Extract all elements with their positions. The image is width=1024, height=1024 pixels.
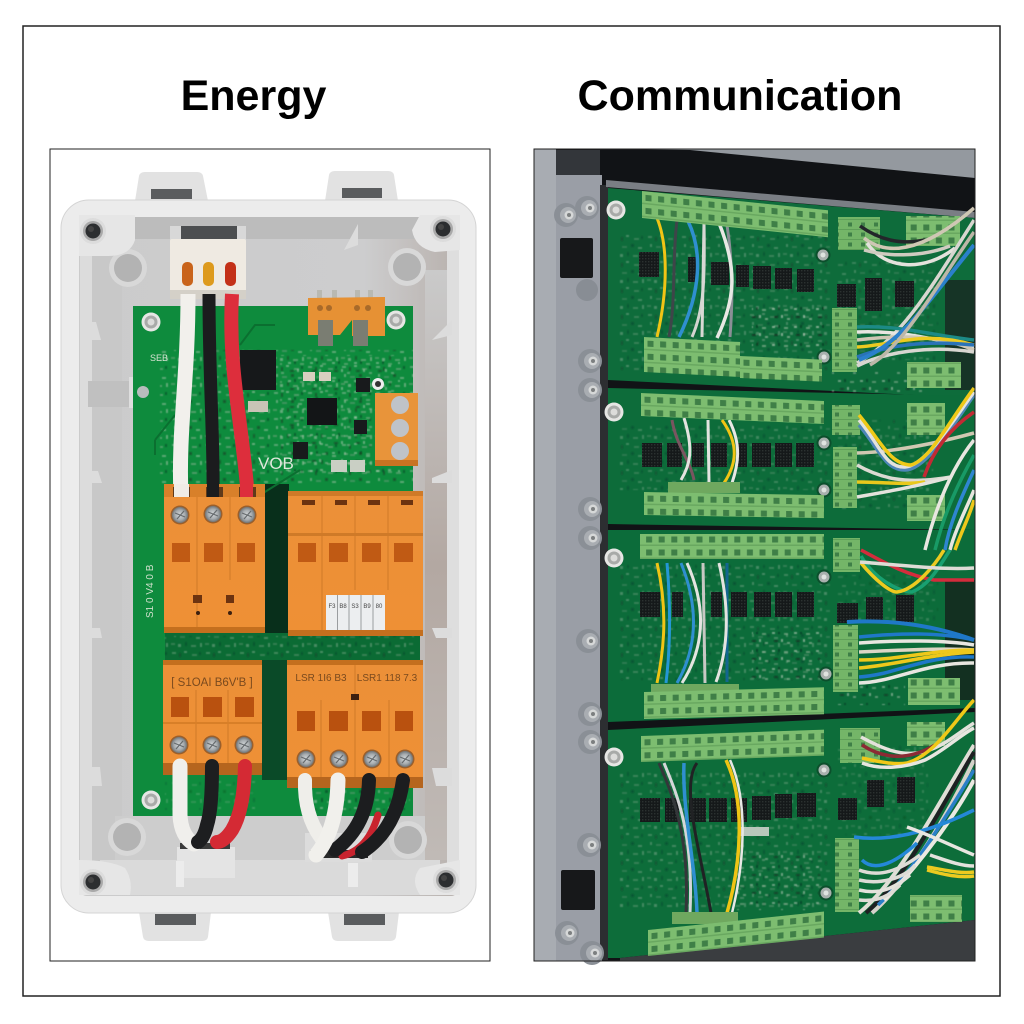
three-way screw terminal <box>375 393 418 466</box>
enclosure mounting tabs <box>135 171 399 941</box>
white label strip: S3 <box>351 604 359 610</box>
terminal label right: LSR1 118 7.3 <box>357 673 418 684</box>
panel: communication rack photo <box>534 149 975 965</box>
terminal strips board 2 <box>641 393 945 521</box>
bottom chassis rail <box>620 920 975 961</box>
circuit board <box>133 306 420 816</box>
left wires board 3 <box>657 563 727 683</box>
white label strip <box>326 595 385 630</box>
rack background <box>534 149 975 961</box>
right wires board 2 <box>857 388 974 550</box>
terminal strips board 1 <box>642 191 961 388</box>
board marking rotated: S1 0 V4 0 B <box>145 564 156 618</box>
left wires board 4 <box>659 760 743 913</box>
small board label <box>740 827 769 836</box>
enclosure rim <box>61 200 476 913</box>
terminal strips board 3 <box>640 534 960 719</box>
white label strip: 80 <box>376 604 383 610</box>
terminal block: bottom right <box>287 660 423 788</box>
panel frame <box>534 149 975 961</box>
right wires board 3 <box>847 550 974 683</box>
terminal block: bottom left <box>163 660 262 775</box>
left wires board 2 <box>672 418 738 483</box>
left wires board 1 <box>657 218 732 338</box>
white label strip: F3 <box>328 604 336 610</box>
power wires top <box>180 294 248 498</box>
title: Communication: Communication <box>578 72 902 120</box>
enclosure floor <box>79 217 459 896</box>
right wires board 1 <box>857 208 974 366</box>
small orange connector <box>308 290 385 346</box>
board 4 <box>604 712 975 958</box>
white label strip: B9 <box>363 604 371 610</box>
rail bolts <box>554 196 604 965</box>
white wire connector <box>170 226 246 299</box>
rack rail <box>534 149 608 961</box>
top cover <box>600 149 975 178</box>
terminal block: top right <box>288 491 423 636</box>
terminal label left: LSR 1I6 B3 <box>295 673 347 684</box>
terminal block: top left <box>164 484 265 633</box>
board top rail <box>606 180 975 218</box>
right wires board 4 <box>854 700 974 913</box>
mounting arm <box>88 377 161 408</box>
board marking VOB: VOB <box>258 454 294 473</box>
board marking left: SEB <box>150 353 168 363</box>
board 2 <box>604 388 975 530</box>
title: Energy: Energy <box>181 72 326 120</box>
white label strip: B8 <box>339 604 347 610</box>
panel: energy enclosure photo <box>50 149 490 961</box>
board screws <box>137 310 406 810</box>
board 3 <box>604 530 975 722</box>
wire relief blocks <box>176 833 372 887</box>
power wires bottom right <box>305 780 403 856</box>
board 1 <box>606 188 975 398</box>
terminal label: [ S1OAI B6V'B ] <box>171 677 253 689</box>
terminal strips board 4 <box>641 722 962 956</box>
side clips <box>82 224 452 786</box>
panel frame <box>50 149 490 961</box>
power wires bottom left <box>180 766 245 844</box>
corner bosses <box>79 215 460 895</box>
